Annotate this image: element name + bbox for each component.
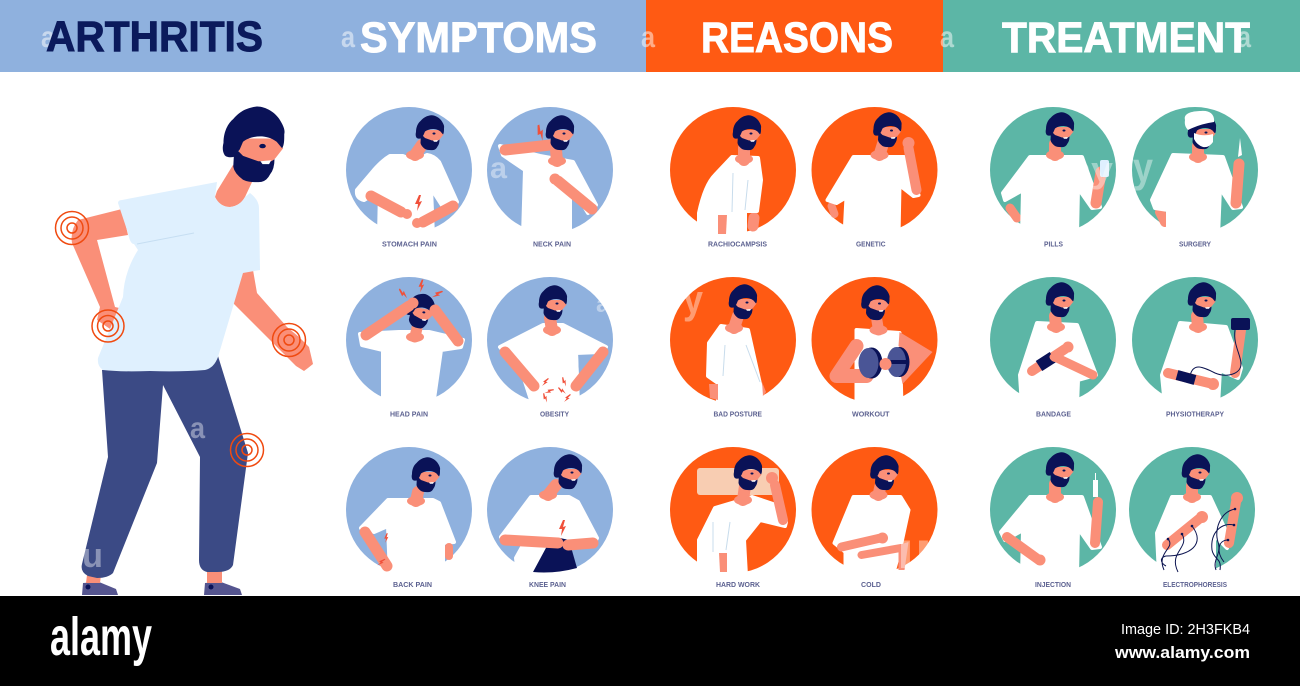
icon: neck pain: a xyxy=(490,152,507,185)
icon: surgery xyxy=(1132,107,1258,236)
label: cold: COLD xyxy=(861,582,881,589)
label: physiotherapy: PHYSIOTHERAPY xyxy=(1166,412,1224,418)
right arm xyxy=(233,270,313,371)
main figure: man with joint pain: u xyxy=(82,537,103,575)
icon: bad posture xyxy=(670,277,796,406)
icon: rachiocampsis xyxy=(670,107,796,236)
header band: a xyxy=(41,21,55,54)
label: pills: PILLS xyxy=(1044,242,1063,248)
icon: surgery: y xyxy=(1133,144,1154,191)
header band: a xyxy=(641,21,655,54)
icon: obesity xyxy=(487,277,613,406)
panel: symptoms xyxy=(346,107,613,589)
website: www.alamy.com xyxy=(1114,643,1250,662)
label: surgery: SURGERY xyxy=(1179,242,1211,248)
label: obesity: OBESITY xyxy=(540,412,569,418)
label: stomach pain: STOMACH PAIN xyxy=(382,242,437,248)
panel: reasons xyxy=(670,107,938,589)
header band: a xyxy=(1237,21,1251,54)
icon: bandage xyxy=(990,277,1116,406)
main figure: man with joint pain xyxy=(56,107,313,595)
pain target: hip xyxy=(92,310,124,342)
pain target: knee xyxy=(230,434,264,466)
icon: cold: ll xyxy=(896,535,932,577)
icon: injection xyxy=(990,447,1116,576)
label: neck pain: NECK PAIN xyxy=(533,242,571,248)
icon: back pain xyxy=(346,447,472,576)
heading: symptoms: SYMPTOMS xyxy=(360,14,597,62)
label: hard work: HARD WORK xyxy=(716,582,760,589)
panel: treatment xyxy=(990,107,1258,589)
label: back pain: BACK PAIN xyxy=(393,582,432,589)
label: knee pain: KNEE PAIN xyxy=(529,582,566,589)
image id: Image ID: 2H3FKB4 xyxy=(1121,621,1250,638)
label: bandage: BANDAGE xyxy=(1036,412,1071,418)
header band: a xyxy=(341,21,355,54)
trousers xyxy=(82,356,248,578)
icon: knee pain xyxy=(487,447,613,576)
left arm xyxy=(72,209,132,331)
pain target: wrist xyxy=(272,324,306,356)
icon: stomach pain xyxy=(346,107,472,236)
icon: workout xyxy=(812,277,938,406)
label: genetic: GENETIC xyxy=(856,242,886,248)
icon: pills: any xyxy=(1045,149,1113,190)
label: head pain: HEAD PAIN xyxy=(390,412,428,418)
icon: physiotherapy xyxy=(1132,277,1258,406)
label: bad posture: BAD POSTURE xyxy=(714,412,762,418)
icon: genetic xyxy=(812,107,938,236)
neck xyxy=(215,165,253,207)
logo: alamy: alamy xyxy=(50,607,152,667)
icon: electrophoresis xyxy=(1129,447,1255,576)
icon: cold xyxy=(812,447,938,577)
heading: reasons: REASONS xyxy=(701,14,893,62)
icon: head pain xyxy=(346,277,472,406)
icon: neck pain xyxy=(487,107,613,236)
icon: obesity: a xyxy=(596,291,611,318)
label: workout: WORKOUT xyxy=(852,412,890,418)
icon: bad posture: y xyxy=(683,278,704,322)
label: rachiocampsis: RACHIOCAMPSIS xyxy=(708,242,767,248)
icon: pills xyxy=(990,107,1116,236)
label: injection: INJECTION xyxy=(1035,582,1071,589)
label: electrophoresis: ELECTROPHORESIS xyxy=(1163,582,1227,589)
t-shirt xyxy=(98,182,260,371)
footer band xyxy=(0,596,1300,686)
head xyxy=(223,107,285,182)
icon: hard work xyxy=(670,447,796,576)
title: arthritis: ARTHRITIS xyxy=(46,13,263,61)
header band: a xyxy=(940,21,954,54)
shoes xyxy=(82,582,242,595)
main figure: man with joint pain: a xyxy=(190,412,205,445)
heading: treatment: TREATMENT xyxy=(1002,14,1250,62)
pain target: elbow xyxy=(56,212,88,244)
header band xyxy=(0,0,1300,72)
